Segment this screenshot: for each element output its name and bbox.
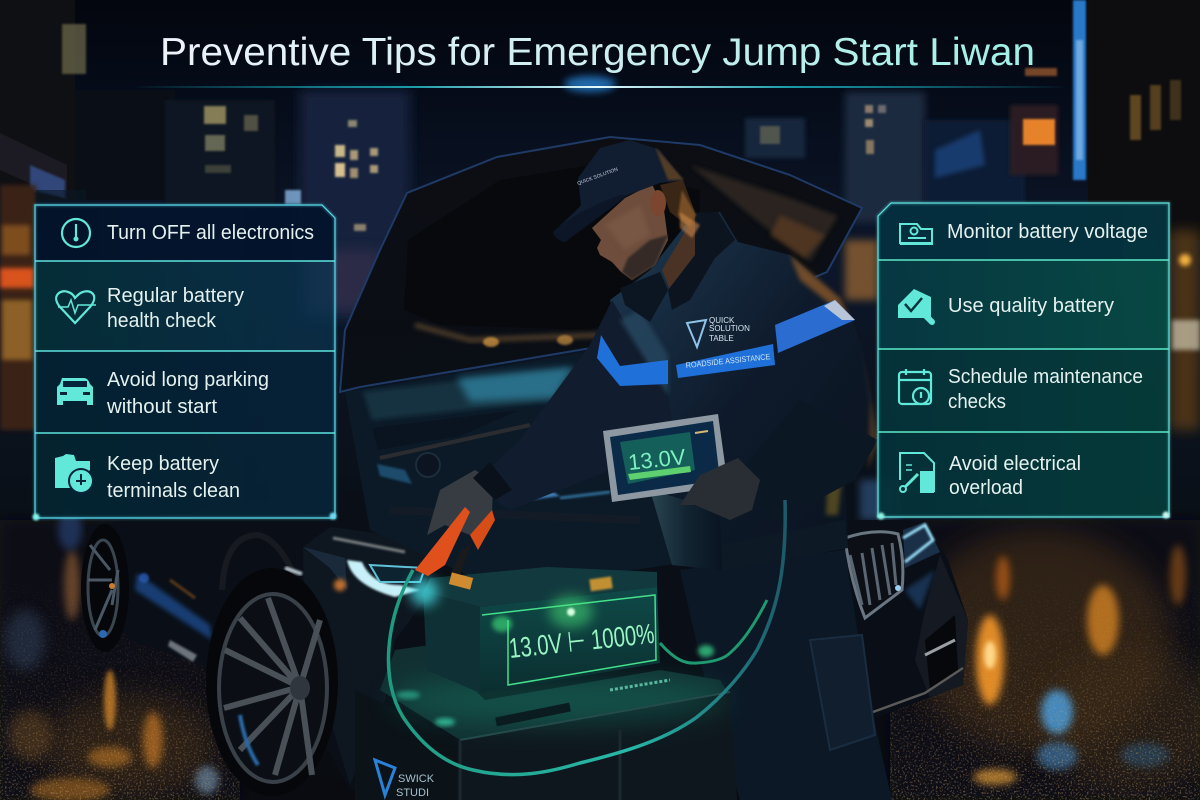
icon: voltage folder xyxy=(900,224,933,244)
battery glowing outline xyxy=(482,595,656,685)
jacket logo xyxy=(685,316,771,370)
centre skyline xyxy=(285,90,805,320)
icon: car xyxy=(57,378,93,405)
side reflections xyxy=(135,573,212,662)
battery readout: 13.0V ⊢ 1000% xyxy=(507,618,656,664)
trousers xyxy=(680,550,892,800)
ear xyxy=(650,190,666,216)
face xyxy=(592,184,668,280)
title xyxy=(95,31,1098,92)
title right flourish xyxy=(1042,50,1098,52)
battery front xyxy=(480,587,660,693)
tip: avoid long parking xyxy=(57,369,269,418)
title underline glow xyxy=(130,76,1070,92)
tip: turn off electronics: Turn OFF all electronics xyxy=(107,222,314,244)
battery side xyxy=(423,592,480,693)
icon: battery terminal xyxy=(55,454,93,493)
blue stripes xyxy=(597,300,855,386)
jacket logo: QUICK xyxy=(709,316,735,325)
open hood xyxy=(340,137,862,392)
tip: clean terminals: Keep battery xyxy=(107,453,219,475)
jacket logo: SOLUTION xyxy=(709,324,750,333)
tip: avoid long parking: Avoid long parking xyxy=(107,369,269,391)
hair xyxy=(660,180,696,228)
tip: battery health check: Regular battery xyxy=(107,285,244,307)
left sleeve xyxy=(472,300,680,510)
icon: check and magnifier xyxy=(898,289,932,322)
jacket logo: ROADSIDE ASSISTANCE xyxy=(685,352,771,370)
tablet: 13.0V xyxy=(627,444,687,475)
tip: avoid overload: overload xyxy=(949,477,1023,499)
title left flourish xyxy=(95,50,153,52)
icon: power clock xyxy=(62,219,90,247)
wet street reflections xyxy=(0,510,1200,800)
icon: calendar xyxy=(899,369,931,404)
panel: right tips xyxy=(878,203,1170,520)
cargo pocket xyxy=(810,635,875,750)
beard xyxy=(622,235,668,280)
left buildings xyxy=(0,0,275,520)
battery top xyxy=(423,567,657,607)
right bumper xyxy=(873,555,968,712)
case logo: SWICK xyxy=(398,773,435,785)
fender xyxy=(303,527,430,785)
battery xyxy=(410,567,660,693)
car side body xyxy=(85,490,968,790)
tip: avoid overload: Avoid electrical xyxy=(949,453,1081,475)
right sleeve xyxy=(745,400,878,525)
tip: schedule maintenance xyxy=(899,366,1143,413)
mechanic: QUICK SOLUTION xyxy=(577,166,619,187)
tip: turn off electronics xyxy=(62,219,314,247)
tip: battery health check xyxy=(56,285,244,332)
tablet xyxy=(603,414,728,502)
title text: Preventive Tips for Emergency Jump Start Liwan xyxy=(160,31,1035,74)
rear wheel xyxy=(81,524,129,652)
left headlight xyxy=(285,538,425,597)
case front right xyxy=(460,692,737,800)
tool case xyxy=(355,645,737,800)
mechanic xyxy=(427,140,892,800)
right glove xyxy=(680,458,760,520)
case logo: STUDI xyxy=(396,787,429,799)
left cuff xyxy=(473,462,512,500)
engine bay xyxy=(345,350,700,590)
cap xyxy=(553,140,683,242)
right headlight xyxy=(903,522,940,568)
tip: quality battery xyxy=(898,289,1114,322)
collar xyxy=(668,212,735,310)
wheel arch xyxy=(222,535,305,605)
tip: clean terminals xyxy=(55,453,240,502)
left glove xyxy=(427,470,493,535)
car xyxy=(81,137,968,796)
grille xyxy=(845,532,903,618)
tip: battery health check: health check xyxy=(107,310,217,332)
case front left xyxy=(355,690,460,800)
case logo xyxy=(375,760,435,799)
tip: schedule maintenance: Schedule maintenance xyxy=(948,366,1143,388)
tip: clean terminals: terminals clean xyxy=(107,480,240,502)
icon: heart pulse xyxy=(56,291,96,323)
jump cables xyxy=(388,500,785,775)
jacket logo: TABLE xyxy=(709,334,734,343)
icon: document and plug xyxy=(900,453,934,492)
jump lead clamps xyxy=(415,507,495,590)
neck highlight xyxy=(680,212,700,238)
tip: monitor voltage: Monitor battery voltage xyxy=(947,221,1148,243)
tip: avoid long parking: without start xyxy=(106,396,217,418)
jacket xyxy=(610,212,878,570)
tip: schedule maintenance: checks xyxy=(948,391,1006,413)
front wheel xyxy=(206,568,338,796)
neck xyxy=(662,215,705,295)
right buildings xyxy=(845,0,1200,520)
case top xyxy=(380,645,728,740)
jacket lower front xyxy=(650,490,722,570)
tip: quality battery: Use quality battery xyxy=(948,295,1114,317)
panel: left tips xyxy=(32,205,336,520)
tip: avoid overload xyxy=(900,453,1081,499)
